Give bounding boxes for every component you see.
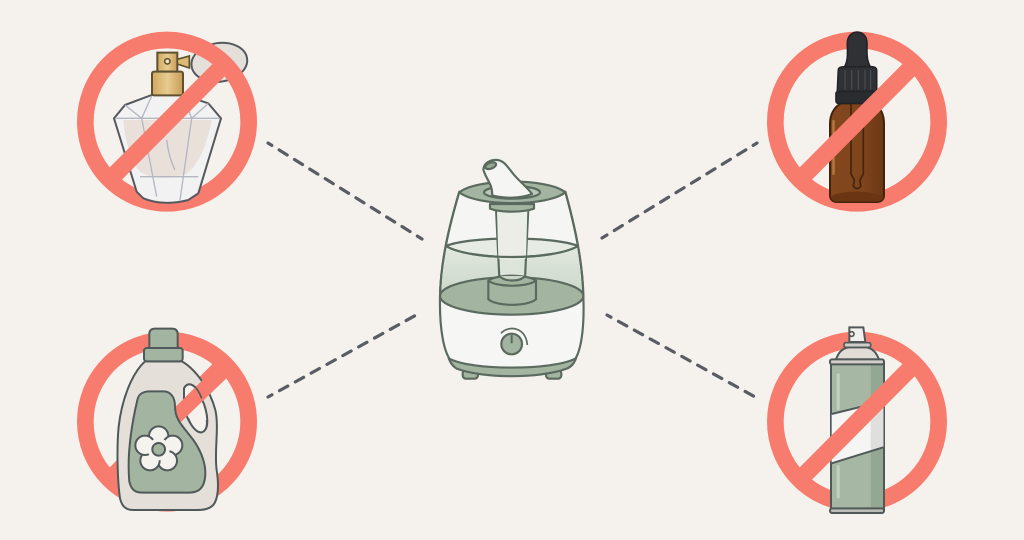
prohibition ring bbox=[775, 340, 939, 503]
icon: prohibited dropper bottle bbox=[775, 32, 939, 203]
mist nozzle bbox=[483, 160, 532, 198]
white label band bbox=[832, 401, 883, 463]
can body bbox=[831, 363, 884, 510]
jug handle opening bbox=[184, 384, 207, 432]
spray nozzle bbox=[849, 327, 865, 342]
slash segment through handle bbox=[175, 363, 230, 423]
prohibition slash bbox=[805, 69, 909, 174]
tank lid bbox=[490, 204, 534, 212]
prohibition ring and slash bbox=[85, 340, 249, 503]
icon: humidifier bbox=[440, 160, 584, 379]
icon: prohibited aerosol can bbox=[775, 327, 939, 513]
can rims and dome bbox=[836, 347, 879, 359]
atomizer bulb bbox=[189, 39, 250, 85]
dashed connector: top right bbox=[602, 143, 757, 238]
icon: prohibited softener jug bbox=[85, 329, 249, 510]
perfume bottle bbox=[114, 95, 221, 203]
flower bbox=[135, 426, 182, 470]
gold pump bbox=[157, 53, 177, 72]
water tank bbox=[440, 192, 583, 297]
base dial bbox=[501, 329, 527, 345]
jug body bbox=[118, 361, 218, 510]
green label bbox=[129, 391, 205, 493]
prohibition slash bbox=[805, 369, 909, 474]
prohibition ring bbox=[85, 40, 249, 203]
dashed connector: top left bbox=[268, 143, 422, 239]
jug cap bbox=[149, 329, 178, 348]
dashed connector: bottom left bbox=[268, 314, 418, 397]
tank floor bbox=[440, 277, 583, 315]
dashed connector: bottom right bbox=[607, 315, 757, 398]
central tube bbox=[496, 208, 528, 278]
tube collar bbox=[488, 276, 536, 305]
prohibition slash bbox=[115, 69, 219, 174]
humidifier base bbox=[440, 297, 584, 370]
amber bottle bbox=[830, 103, 884, 202]
humidifier feet bbox=[463, 370, 561, 379]
dropper cap and bulb bbox=[844, 32, 871, 67]
prohibition ring bbox=[775, 40, 939, 203]
icon: prohibited perfume bottle bbox=[85, 39, 250, 203]
